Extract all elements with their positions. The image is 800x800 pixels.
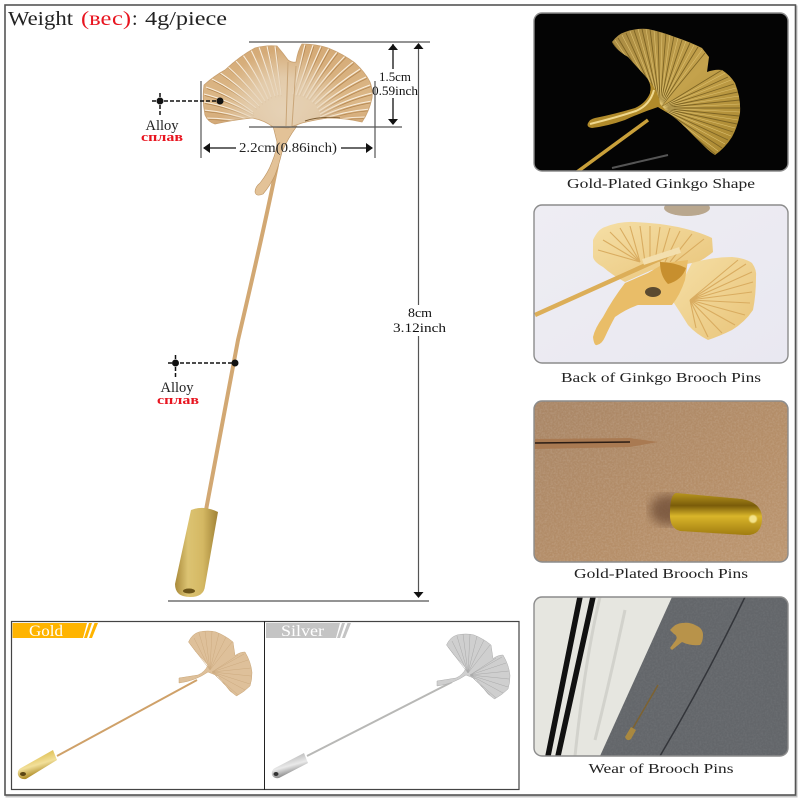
photo: wear of brooch pins xyxy=(534,597,788,756)
gold brooch xyxy=(18,631,252,779)
title: weight: (вес) xyxy=(81,8,131,30)
gold tag: Gold xyxy=(29,623,63,640)
caption: wear of brooch pins: Wear of Brooch Pins xyxy=(588,762,734,777)
dimension: total length 8cm: 8cm xyxy=(408,305,432,320)
dimension: leaf width 2.2cm: 2.2cm(0.86inch) xyxy=(239,140,337,155)
pin cap xyxy=(175,508,218,597)
main brooch pin illustration xyxy=(175,44,373,597)
callout: alloy leaf: сплав xyxy=(141,130,183,144)
callout: alloy shaft xyxy=(157,355,238,407)
silver brooch xyxy=(272,634,510,778)
dimension: leaf width 2.2cm xyxy=(201,81,375,158)
dimension: leaf height 1.5cm: 1.5cm xyxy=(379,69,411,84)
photo: back of ginkgo brooch xyxy=(534,200,788,363)
caption: back of brooch: Back of Ginkgo Brooch Pins xyxy=(561,371,761,386)
title: weight: 4g/piece xyxy=(145,8,227,30)
gold tag xyxy=(12,623,98,640)
callout: alloy shaft: Alloy xyxy=(160,380,194,396)
photo: gold-plated ginkgo shape xyxy=(534,13,788,172)
title: weight: : xyxy=(132,8,138,30)
dimension: total length 8cm: 3.12inch xyxy=(393,320,447,335)
callout: alloy shaft: сплав xyxy=(157,393,199,407)
caption: gold-plated ginkgo shape: Gold-Plated Ginkgo Shape xyxy=(567,177,755,192)
panel: colour options xyxy=(12,621,519,790)
title: weight: Weight xyxy=(8,8,74,30)
dimension: total length 8cm xyxy=(168,43,447,601)
callout: alloy leaf xyxy=(141,93,224,144)
leaf stem xyxy=(255,126,297,195)
silver tag xyxy=(266,623,351,640)
dimension: leaf height 1.5cm xyxy=(249,42,430,127)
title: weight xyxy=(8,8,227,30)
dimension: leaf height 1.5cm: 0.59inch xyxy=(372,83,419,98)
ginkgo leaf xyxy=(202,44,373,128)
photo: gold-plated brooch pin cap xyxy=(534,401,788,562)
callout: alloy leaf: Alloy xyxy=(145,118,179,134)
silver tag: Silver xyxy=(281,623,325,640)
caption: gold-plated brooch pins: Gold-Plated Brooch Pins xyxy=(574,567,748,582)
pin shaft xyxy=(206,165,277,510)
